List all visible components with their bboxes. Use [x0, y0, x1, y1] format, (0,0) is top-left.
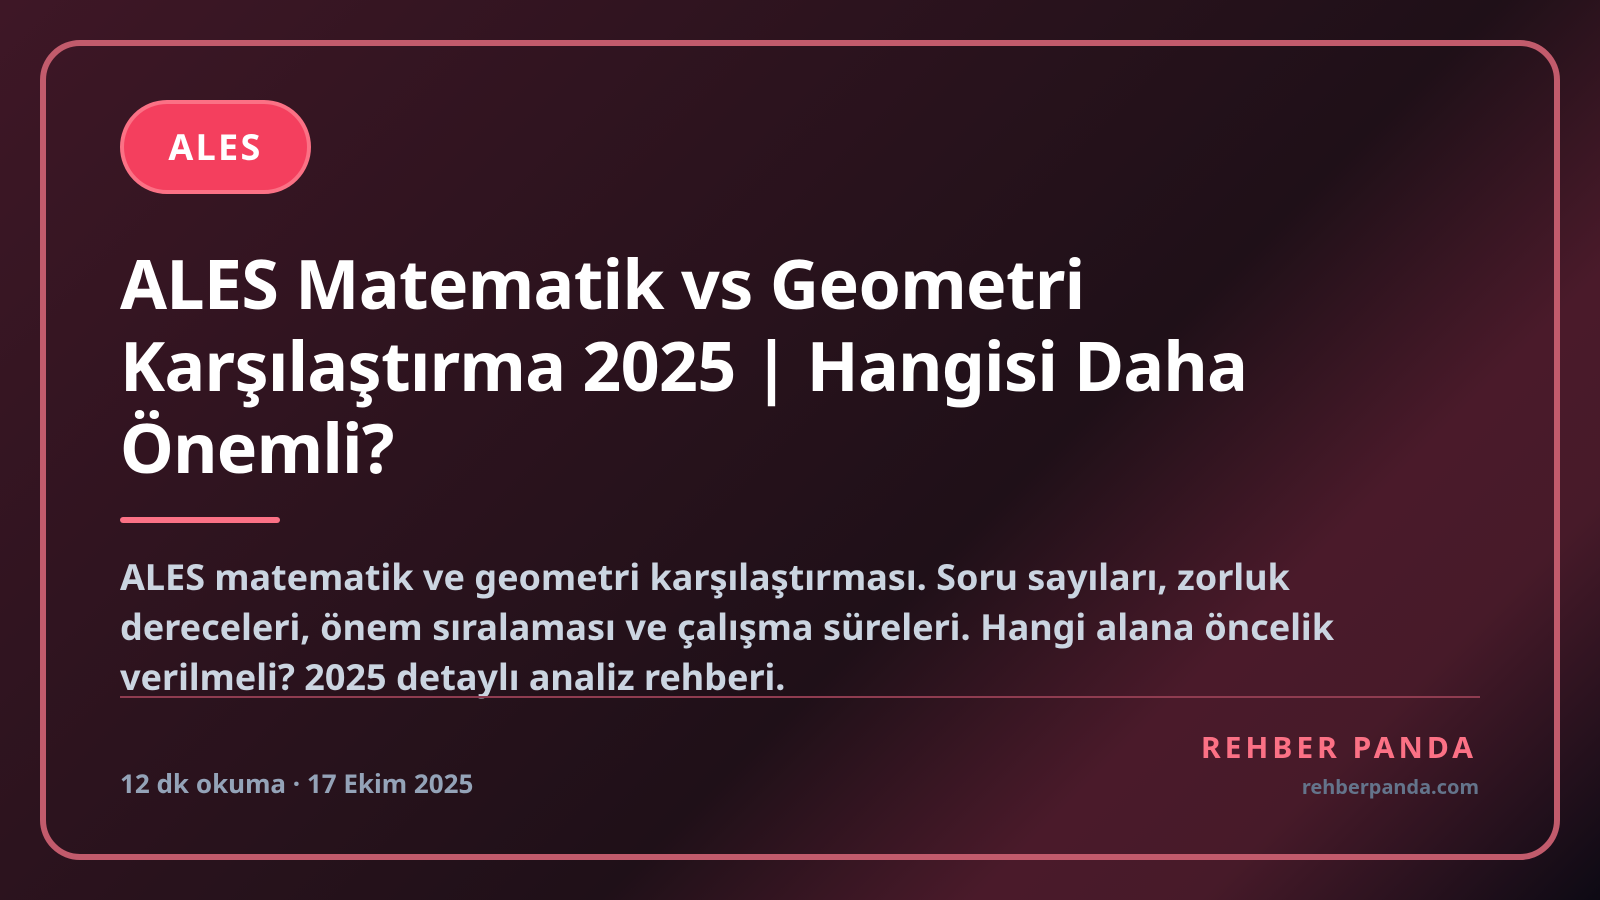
description — [120, 552, 1334, 701]
description: verilmeli? 2025 detaylı analiz rehberi. — [120, 652, 785, 701]
badge: ALES — [120, 100, 311, 194]
badge: ALES: ALES — [168, 122, 263, 171]
brand website: rehberpanda.com — [1302, 773, 1479, 800]
brand name: REHBER PANDA — [1201, 726, 1477, 767]
title — [120, 236, 1247, 493]
accent bar — [120, 517, 280, 523]
description: dereceleri, önem sıralaması ve çalışma süreleri. Hangi alana öncelik — [120, 602, 1334, 651]
title: Karşılaştırma 2025 | Hangisi Daha — [120, 318, 1247, 411]
description: ALES matematik ve geometri karşılaştırması. Soru sayıları, zorluk — [120, 552, 1290, 601]
title: Önemli? — [120, 400, 394, 493]
footer divider — [120, 696, 1480, 698]
title: ALES Matematik vs Geometri — [120, 236, 1084, 329]
reading time and date: 12 dk okuma · 17 Ekim 2025 — [120, 765, 473, 801]
